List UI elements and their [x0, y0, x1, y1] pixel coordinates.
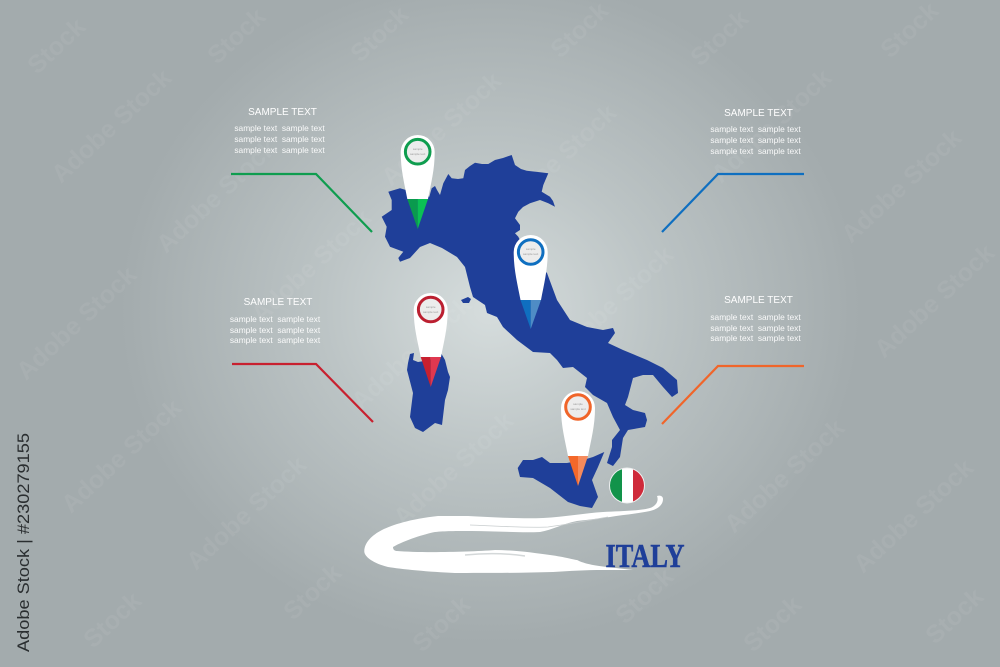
pin: orange	[561, 391, 595, 486]
leader line: orange	[662, 366, 804, 424]
watermark pattern: Adobe Stock	[869, 239, 1000, 363]
watermark pattern: Adobe Stock	[848, 454, 979, 578]
pin ring	[566, 395, 590, 419]
white brush stroke	[364, 496, 663, 573]
pin tip	[520, 300, 531, 329]
watermark pattern: Adobe Stock	[836, 124, 967, 248]
watermark pattern: Stock	[920, 583, 989, 650]
pin: blue: sample text	[523, 252, 539, 256]
pin: blue: sample	[526, 247, 536, 251]
text block: middle right: SAMPLE TEXT	[724, 295, 793, 306]
pin ring	[405, 139, 430, 164]
watermark pattern: Stock	[278, 559, 347, 626]
island: Sardinia	[407, 353, 450, 432]
watermark pattern: Adobe Stock	[388, 407, 519, 531]
mainland	[382, 155, 678, 466]
text block: top left: sample text sample text	[234, 134, 325, 144]
leader line: red	[232, 364, 373, 422]
watermark pattern: Adobe Stock	[56, 394, 187, 518]
watermark pattern: Adobe Stock	[46, 64, 177, 188]
title: ITALY: ITALY	[606, 538, 684, 575]
text block: middle left: sample text sample text	[230, 335, 321, 345]
pin: green	[401, 135, 435, 229]
watermark pattern: Stock	[78, 587, 147, 654]
text block: top right	[710, 108, 801, 156]
watermark pattern: Stock	[345, 1, 414, 68]
text block: middle right: sample text sample text	[710, 323, 801, 333]
watermark pattern: Adobe Stock	[491, 99, 622, 223]
icon: Italian flag badge	[609, 468, 645, 504]
pin: green: sample text	[410, 152, 426, 156]
pin: orange: sample	[573, 402, 583, 406]
leader line: green	[231, 174, 372, 232]
watermark pattern: Stock	[22, 13, 91, 80]
pin: red: sample	[426, 305, 436, 309]
text block: top left: SAMPLE TEXT	[248, 107, 317, 118]
pin body	[561, 391, 595, 456]
pin: red: sample text	[423, 310, 439, 314]
pin body	[414, 293, 448, 357]
watermark pattern: Adobe Stock	[11, 261, 142, 385]
text block: middle left	[230, 297, 321, 345]
pin body	[401, 135, 435, 199]
watermark pattern: Stock	[610, 563, 679, 630]
island: Elba	[461, 297, 471, 303]
text block: middle left: sample text sample text	[230, 325, 321, 335]
stock id vertical text: Adobe Stock | #230279155	[14, 433, 33, 652]
watermark pattern: Stock	[685, 5, 754, 72]
pin body	[514, 235, 548, 300]
watermark pattern: Adobe Stock	[246, 204, 377, 328]
watermark pattern: Adobe Stock	[548, 241, 679, 365]
pin: green: sample	[413, 147, 423, 151]
text block: top left: sample text sample text	[234, 145, 325, 155]
watermark pattern: Adobe Stock	[181, 451, 312, 575]
text block: top right: sample text sample text	[710, 135, 801, 145]
pin: orange: sample text	[570, 407, 586, 411]
watermark pattern: Stock	[202, 3, 271, 70]
text block: top right: SAMPLE TEXT	[724, 108, 793, 119]
text block: middle left: SAMPLE TEXT	[244, 297, 312, 308]
watermark pattern: Stock	[407, 591, 476, 658]
watermark pattern: Adobe Stock	[151, 134, 282, 258]
text block: middle right: sample text sample text	[710, 312, 801, 322]
watermark pattern: Adobe Stock	[376, 67, 507, 191]
pin tip	[421, 357, 431, 387]
map of Italy	[382, 155, 678, 508]
text block: top right: sample text sample text	[710, 146, 801, 156]
pin: red	[414, 293, 448, 387]
text block: middle left: sample text sample text	[230, 314, 321, 324]
watermark pattern: Stock	[738, 591, 807, 658]
pin tip	[407, 199, 418, 229]
text block: middle right	[710, 295, 801, 343]
watermark pattern: Adobe Stock	[346, 291, 477, 415]
pin: blue	[514, 235, 548, 329]
pin ring	[418, 297, 443, 322]
watermark pattern: Adobe Stock	[719, 414, 850, 538]
pin tip	[568, 456, 578, 486]
island: Sicily	[518, 452, 604, 508]
leader line: blue	[662, 174, 804, 232]
watermark pattern: Adobe Stock	[706, 64, 837, 188]
pin ring	[518, 240, 543, 264]
text block: middle right: sample text sample text	[710, 333, 801, 343]
text block: top left: sample text sample text	[234, 123, 325, 133]
text block: top right: sample text sample text	[710, 124, 801, 134]
text block: top left	[234, 107, 325, 155]
